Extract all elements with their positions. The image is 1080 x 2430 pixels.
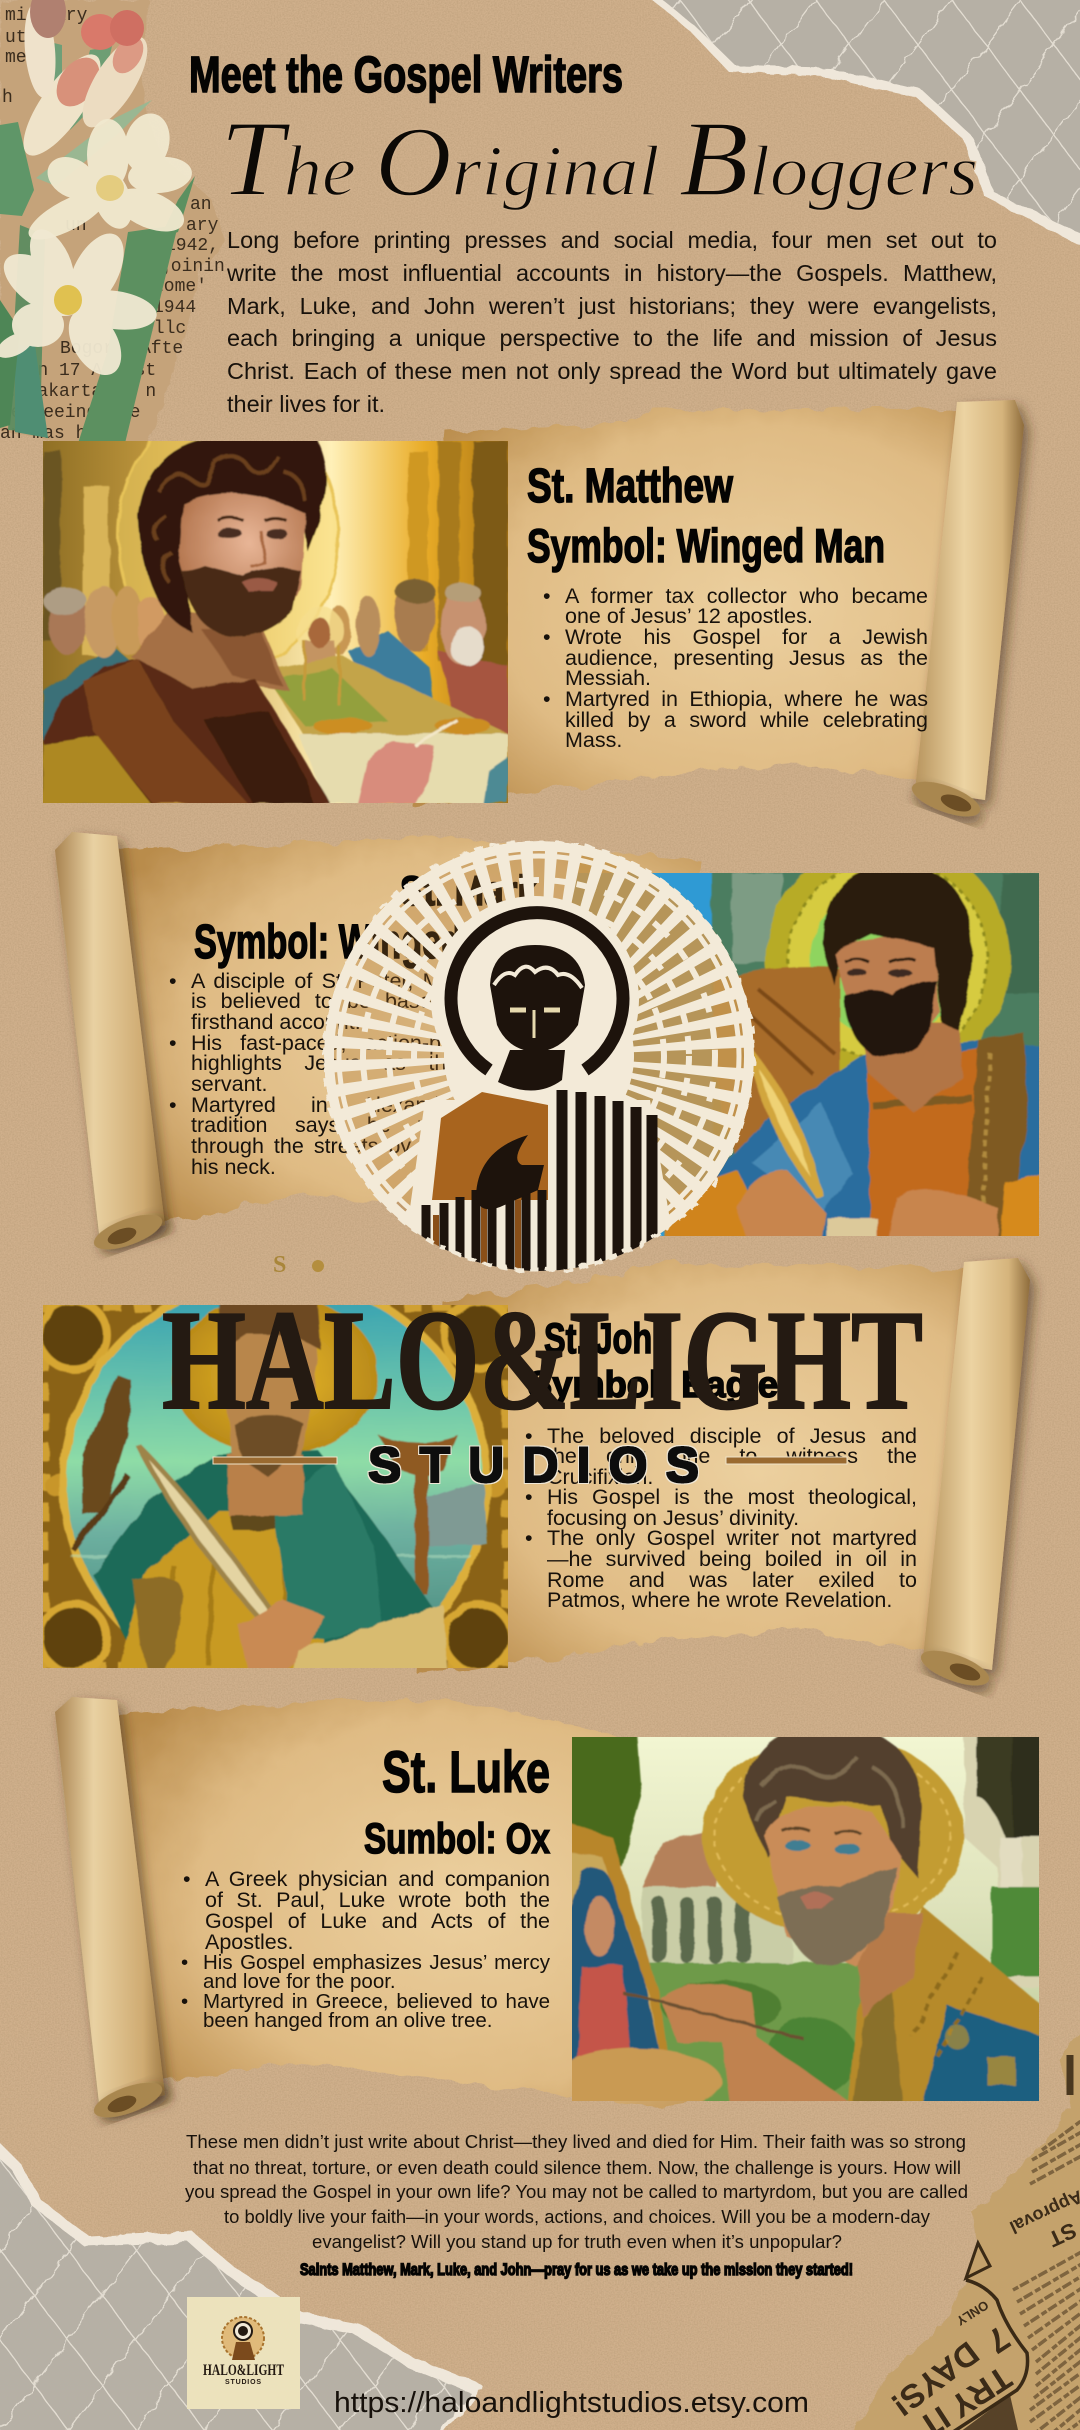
small studio logo bbox=[187, 2297, 300, 2409]
easel with Madonna bbox=[567, 1822, 672, 2082]
hair back bbox=[138, 436, 326, 633]
bullet list: Mark: highlights Jesus as the suffering bbox=[191, 1051, 563, 1075]
heading: Meet the Gospel Writers: Meet the Gospel Writers bbox=[189, 46, 623, 103]
ad border bbox=[966, 2243, 990, 2278]
face bbox=[834, 939, 940, 1043]
icon: upper lily bbox=[22, 108, 193, 249]
left robe bbox=[432, 1092, 548, 1200]
bullet list: John: The only Gospel writer not martyred bbox=[547, 1526, 917, 1550]
rim dashes bbox=[325, 842, 753, 1270]
newspaper scrap: bottom right: ST bbox=[1044, 2217, 1080, 2252]
halo bbox=[172, 1295, 378, 1455]
logo disc with knockout rays bbox=[324, 841, 754, 1271]
bullet list: John: Rome and was later exiled to bbox=[547, 1568, 917, 1592]
right people bbox=[348, 631, 438, 736]
chalice bbox=[378, 1435, 458, 1595]
wing bbox=[712, 967, 840, 1163]
bullet list: Matthew: Martyred in Ethiopia, where he was bbox=[565, 687, 928, 711]
typewriter text on scrap: cide bbox=[110, 466, 153, 486]
robe bbox=[43, 659, 331, 804]
bullet list: Luke: and love for the poor. bbox=[203, 1970, 396, 1993]
bullet list: Mark: is believed to be based on Peter’s bbox=[191, 989, 563, 1013]
typewriter text on scrap: Afte bbox=[140, 339, 183, 359]
logo figure bbox=[426, 913, 652, 1285]
bullet list: Mark: Martyred in Alexandria, where bbox=[191, 1093, 563, 1117]
bullet list: Mark: servant. bbox=[191, 1072, 267, 1096]
watermark: HALO & LIGHT wordmark bbox=[162, 1252, 923, 1493]
closing paragraph: that no threat, torture, or even death could silence them. Now, the challenge is yours. How will bbox=[193, 2157, 961, 2178]
bullet list: John bbox=[522, 1426, 922, 1620]
newspaper scrap: bottom right: 7 bbox=[980, 2318, 1016, 2360]
bullet list: Luke bbox=[175, 1869, 560, 2039]
icon: green stems and leaves bbox=[0, 40, 195, 472]
watermark: Halo and Light circular logo bbox=[322, 840, 756, 1274]
typewriter text on scrap: Home' bbox=[153, 277, 207, 297]
bullet list: Luke: His Gospel emphasizes Jesus’ mercy bbox=[203, 1951, 550, 1974]
typewriter text on scrap: un bbox=[65, 216, 87, 236]
panel: St. John bbox=[39, 1258, 1030, 1693]
small studio logo: STUDIOS bbox=[225, 2379, 261, 2386]
typewriter text on scrap: ary bbox=[55, 6, 88, 26]
intro paragraph: their lives for it. bbox=[227, 391, 385, 417]
palette bbox=[552, 2048, 722, 2116]
neck bbox=[131, 607, 290, 691]
typewriter text on scrap: mi bbox=[5, 6, 27, 26]
mantle and robe bbox=[93, 1450, 438, 1673]
eagle bbox=[83, 1375, 131, 1515]
quill feather bbox=[138, 1445, 298, 1650]
painting: St. John with quill bbox=[43, 1305, 508, 1668]
website URL: https://haloandlightstudios.etsy.com bbox=[334, 2387, 809, 2419]
typewriter text on scrap: ary bbox=[186, 216, 219, 236]
bullet list: Mark bbox=[165, 970, 570, 1186]
bullet list: Matthew: audience, presenting Jesus as the bbox=[565, 646, 928, 670]
robe stripes bbox=[562, 1090, 652, 1285]
newspaper scrap: bottom right bbox=[850, 2020, 1080, 2430]
bullet list: Matthew: one of Jesus’ 12 apostles. bbox=[565, 604, 813, 628]
floral illustration: lilies and buds bbox=[0, 0, 225, 490]
hand bbox=[358, 741, 434, 804]
typewriter text on scrap: an mas he bbox=[0, 424, 97, 444]
closing paragraph: These men didn’t just write about Christ—they lived and died for Him. Their faith was so strong bbox=[186, 2131, 966, 2152]
bullet list: Luke: Gospel of Luke and Acts of the bbox=[205, 1909, 550, 1933]
bullet list: Mark: his neck. bbox=[191, 1155, 276, 1179]
bullet list: Mark: tradition says he was dragged bbox=[191, 1113, 563, 1137]
heading: St. Mark: St. Mark bbox=[400, 867, 538, 914]
face bbox=[765, 1806, 902, 1967]
hand bbox=[238, 1600, 323, 1673]
bar right bbox=[726, 1457, 847, 1464]
bullet list: Mark: firsthand account. bbox=[191, 1010, 361, 1034]
closing paragraph: to boldly live your faith—in your words, actions, and choices. Will you be a modern-day bbox=[224, 2206, 931, 2227]
closing prayer line: Saints Matthew, Mark, Luke, and John—pray for us as we take up the mission they started! bbox=[300, 2261, 853, 2279]
bullet list: John: focusing on Jesus’ divinity. bbox=[547, 1506, 799, 1530]
intro paragraph: Mark, Luke, and John weren’t just historians; they were evangelists, bbox=[227, 293, 997, 319]
bullet list: Luke: of St. Paul, Luke wrote both the bbox=[205, 1888, 550, 1912]
bullet list: John: —he survived being boiled in oil in bbox=[547, 1547, 917, 1571]
gold underlay seen through rays bbox=[324, 841, 754, 1268]
typewriter text on scrap: verseeing the bbox=[0, 403, 140, 423]
heading: St. Matthew: St. Matthew bbox=[527, 460, 734, 513]
bar left bbox=[213, 1457, 337, 1464]
robe bbox=[702, 1040, 1044, 1241]
bullet list: John: the only one to witness the bbox=[547, 1444, 917, 1468]
torn grey paper: top right bbox=[640, 0, 1080, 250]
typewriter text on scrap: 1942, bbox=[165, 236, 219, 256]
hand glyph bbox=[476, 1135, 544, 1209]
bullet list: Mark: • bbox=[169, 1031, 177, 1055]
scroll: John parchment bbox=[420, 1258, 1030, 1693]
left people bbox=[43, 646, 153, 761]
typewriter text on scrap: t Jakarta to n bbox=[5, 382, 156, 402]
bullet list: Matthew: • bbox=[543, 625, 551, 649]
bullet list: Luke: • bbox=[181, 1951, 188, 1974]
icon: lower lily bbox=[0, 223, 159, 384]
arm and hand bbox=[661, 1983, 854, 2105]
heading: St. John: St. John bbox=[544, 1315, 672, 1363]
painting: St. Luke painting the Madonna bbox=[572, 1737, 1039, 2101]
typewriter text on scrap: e on 17 August bbox=[5, 361, 156, 381]
scroll: Matthew parchment bbox=[413, 400, 1024, 824]
bullet list: John: Patmos, where he wrote Revelation. bbox=[547, 1588, 892, 1612]
hair curls bbox=[154, 455, 305, 581]
panel: St. Matthew bbox=[43, 400, 1024, 824]
small studio logo: HALO&LIGHT bbox=[203, 2362, 284, 2379]
bullet list: John: • bbox=[525, 1485, 533, 1509]
typewriter text on scrap: 1944 bbox=[153, 298, 196, 318]
newspaper scrap behind flowers bbox=[0, 0, 225, 490]
newspaper scrap: bottom right: ONLY bbox=[954, 2297, 991, 2329]
panel: St. Luke bbox=[55, 1697, 1044, 2125]
logo icon bbox=[222, 2317, 264, 2360]
bullet list: Mark: • bbox=[169, 1093, 177, 1117]
newspaper scrap: bottom right: DAYS! bbox=[884, 2334, 986, 2424]
bullet list: Luke: • bbox=[181, 1990, 188, 2013]
bullet list: Luke: Martyred in Greece, believed to have bbox=[203, 1990, 550, 2013]
intro paragraph bbox=[227, 224, 999, 429]
bullet list: John: • bbox=[525, 1526, 533, 1550]
closing paragraph: you spread the Gospel in your own life? You may not be called to martyrdom, but you are called bbox=[185, 2181, 968, 2202]
roof and cloister bbox=[642, 1830, 716, 1887]
scroll: Luke parchment bbox=[55, 1697, 700, 2125]
hair bbox=[822, 865, 972, 1029]
typewriter text on scrap: me bbox=[5, 48, 27, 68]
bullet list: Matthew: • bbox=[543, 687, 551, 711]
face bbox=[228, 1455, 303, 1515]
brush bbox=[622, 1992, 804, 2039]
beard bbox=[777, 1867, 897, 1965]
neck bbox=[854, 1913, 923, 2017]
robe bbox=[847, 1907, 1044, 2105]
panel: St. Mark bbox=[55, 832, 1044, 1257]
beard bbox=[844, 981, 937, 1057]
intro paragraph: each bringing a unique perspective to the life and mission of Jesus bbox=[227, 325, 997, 351]
scroll: Mark parchment bbox=[55, 832, 700, 1257]
right arches bbox=[964, 1732, 1044, 1987]
neck and shoulders bbox=[498, 1050, 565, 1091]
hands bbox=[737, 1170, 826, 1241]
left hem stripes bbox=[426, 1190, 542, 1285]
book bbox=[293, 1605, 448, 1673]
typewriter text on scrap: joinin bbox=[160, 257, 225, 277]
painting: St. Matthew at the table bbox=[43, 441, 508, 803]
torn grey paper: bottom left bbox=[0, 2133, 482, 2430]
heading: Symbol: Winged Man: Symbol: Winged Man bbox=[527, 519, 885, 572]
bullet list: Matthew: killed by a sword while celebrating bbox=[565, 708, 928, 732]
bullet list: Matthew: Messiah. bbox=[565, 666, 651, 690]
watermark: HALO & LIGHT wordmark: STUDIOS bbox=[368, 1437, 699, 1493]
bullet list: Luke: Apostles. bbox=[205, 1930, 293, 1954]
small gold fragments: S bbox=[273, 1252, 286, 1278]
halo bbox=[702, 1735, 964, 1935]
heading: Symbol: Winged Lion: Symbol: Winged Lion bbox=[194, 916, 544, 969]
heading: Symbol: Ox: Sumbol: Ox bbox=[364, 1815, 550, 1863]
typewriter text on scrap: ellc bbox=[143, 319, 186, 339]
intro paragraph: Long before printing presses and social media, four men set out to bbox=[227, 227, 997, 253]
typewriter text on scrap bbox=[0, 6, 225, 486]
closing paragraph bbox=[185, 2131, 968, 2279]
bullet list: Mark: His fast-paced, action-packed story bbox=[191, 1031, 563, 1055]
typewriter text on scrap: an bbox=[190, 195, 212, 215]
typewriter text on scrap: Bogor. bbox=[60, 339, 125, 359]
typewriter text on scrap: h bbox=[2, 88, 13, 108]
column text rows bbox=[1013, 2118, 1080, 2430]
bullet list: John: His Gospel is the most theological, bbox=[547, 1485, 917, 1509]
typewriter text on scrap: ut bbox=[5, 28, 27, 48]
face bbox=[179, 493, 305, 633]
garden bbox=[632, 1963, 872, 2105]
goblet bbox=[133, 1577, 183, 1673]
bullet list: Matthew bbox=[540, 586, 932, 762]
bullet list: Matthew: Wrote his Gospel for a Jewish bbox=[565, 625, 928, 649]
closing paragraph: evangelist? Will you stand up for truth even when it’s unpopular? bbox=[312, 2231, 842, 2252]
painting: St. Mark writing bbox=[572, 873, 1039, 1236]
typewriter text on scrap: Body bbox=[110, 445, 153, 465]
title: The Original Bloggers: The Original Bloggers bbox=[220, 100, 978, 219]
bullet list: Luke: been hanged from an olive tree. bbox=[203, 2009, 492, 2032]
bullet list: Mark: through the streets by a rope around bbox=[191, 1134, 563, 1158]
head bbox=[490, 945, 585, 1052]
feather bbox=[751, 1053, 820, 1197]
table bbox=[263, 656, 508, 734]
intro paragraph: Christ. Each of these men not only spread the Word but ultimately gave bbox=[227, 358, 997, 384]
neck bbox=[862, 1023, 964, 1111]
heading: Symbol: Eagle: Symbol: Eagle bbox=[528, 1364, 778, 1405]
heading: St. Luke: St. Luke bbox=[382, 1740, 550, 1805]
bullet list: Matthew: Mass. bbox=[565, 728, 622, 752]
hair bbox=[742, 1725, 922, 1877]
bullet list: John: Crucifixion. bbox=[547, 1465, 653, 1489]
intro paragraph: write the most influential accounts in history—the Gospels. Matthew, bbox=[227, 260, 997, 286]
icon: flower buds bbox=[10, 0, 160, 166]
